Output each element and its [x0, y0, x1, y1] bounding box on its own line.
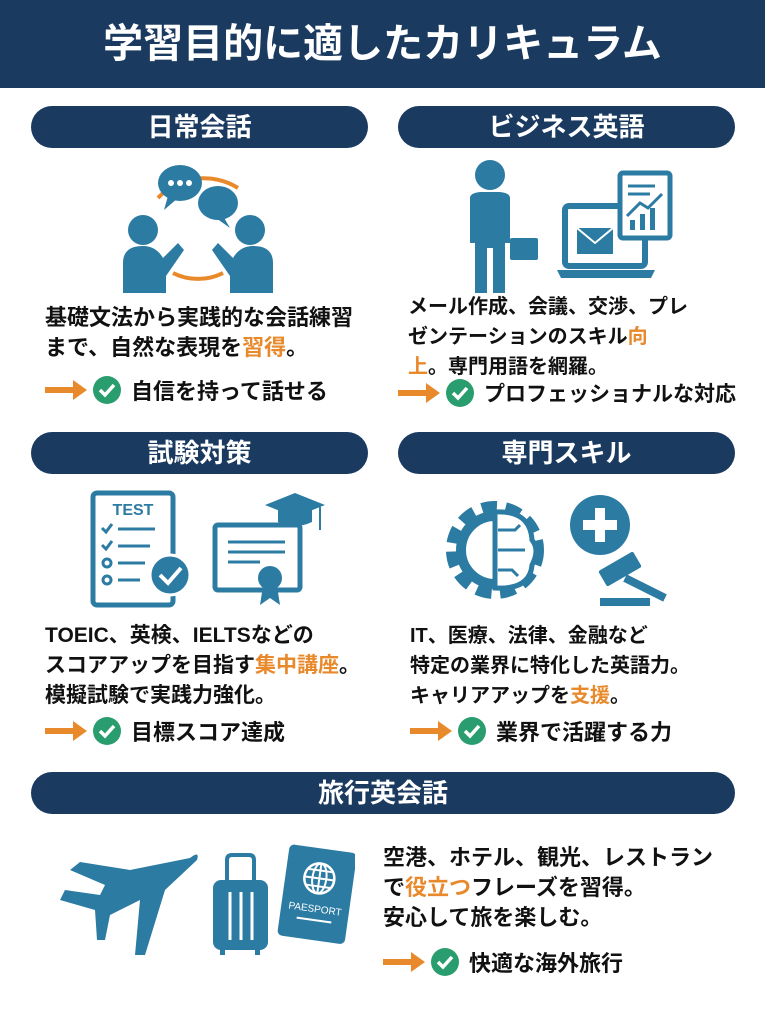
result: 快適な海外旅行: 快適な海外旅行: [469, 951, 623, 976]
icon: plane, suitcase, passport: [60, 844, 355, 955]
text: 試験対策 description: 模擬試験で実践力強化。: [45, 684, 276, 707]
icon: test and certificate: [90, 490, 325, 608]
text: 旅行英会話 description: で役立つフレーズを習得。: [383, 875, 646, 900]
result: 業界で活躍する力: [410, 717, 672, 745]
icon: gear brain, medical, gavel: [446, 495, 667, 606]
panel heading: 専門スキル: 専門スキル: [501, 438, 632, 468]
text: ビジネス英語 description: ゼンテーションのスキル向: [408, 326, 648, 348]
text: 旅行英会話 description: [383, 845, 713, 930]
text: 専門スキル description: 特定の業界に特化した英語力。: [410, 655, 690, 677]
text: 専門スキル description: キャリアアップを支援。: [410, 685, 630, 707]
text: 日常会話 description: まで、自然な表現を習得。: [45, 335, 308, 360]
text: ビジネス英語 description: [408, 296, 688, 378]
result: 快適な海外旅行: [383, 948, 623, 976]
result: 目標スコア達成: 目標スコア達成: [131, 720, 285, 745]
panel heading: 専門スキル: [398, 432, 735, 474]
result: プロフェッショナルな対応: プロフェッショナルな対応: [484, 383, 736, 406]
text: 試験対策 description: [45, 624, 360, 707]
result: 自信を持って話せる: 自信を持って話せる: [131, 379, 328, 404]
text: 専門スキル description: [410, 624, 690, 707]
result: 目標スコア達成: [45, 717, 285, 745]
icon: conversation: [123, 165, 273, 293]
panel heading: ビジネス英語: ビジネス英語: [488, 112, 644, 142]
text: 旅行英会話 description: 安心して旅を楽しむ。: [383, 905, 602, 930]
title: [0, 0, 765, 88]
icon: businessman with laptop: [470, 160, 672, 293]
panel heading: 試験対策: 試験対策: [147, 438, 252, 468]
icon: test and certificate: TEST: [113, 502, 154, 519]
title: 学習目的に適したカリキュラム: [103, 22, 662, 66]
text: 旅行英会話 description: 空港、ホテル、観光、レストラン: [383, 845, 713, 870]
text: ビジネス英語 description: 上。専門用語を網羅。: [408, 356, 608, 378]
icon: plane, suitcase, passport: PAESPORT: [288, 900, 342, 919]
panel heading: 試験対策: [31, 432, 368, 474]
panel heading: ビジネス英語: [398, 106, 735, 148]
panel heading: 旅行英会話: 旅行英会話: [318, 778, 448, 808]
text: 日常会話 description: [45, 305, 353, 360]
text: 日常会話 description: 基礎文法から実践的な会話練習: [45, 305, 353, 330]
text: 試験対策 description: TOEIC、英検、IELTSなどの: [45, 624, 314, 647]
panel heading: 日常会話: 日常会話: [147, 112, 252, 142]
panel heading: 日常会話: [31, 106, 368, 148]
result: プロフェッショナルな対応: [398, 379, 736, 407]
text: 専門スキル description: IT、医療、法律、金融など: [410, 625, 648, 647]
result: 自信を持って話せる: [45, 376, 328, 404]
text: 試験対策 description: スコアアップを目指す集中講座。: [45, 654, 360, 677]
text: ビジネス英語 description: メール作成、会議、交渉、プレ: [408, 296, 688, 318]
result: 業界で活躍する力: 業界で活躍する力: [496, 720, 672, 745]
panel heading: 旅行英会話: [31, 772, 735, 814]
